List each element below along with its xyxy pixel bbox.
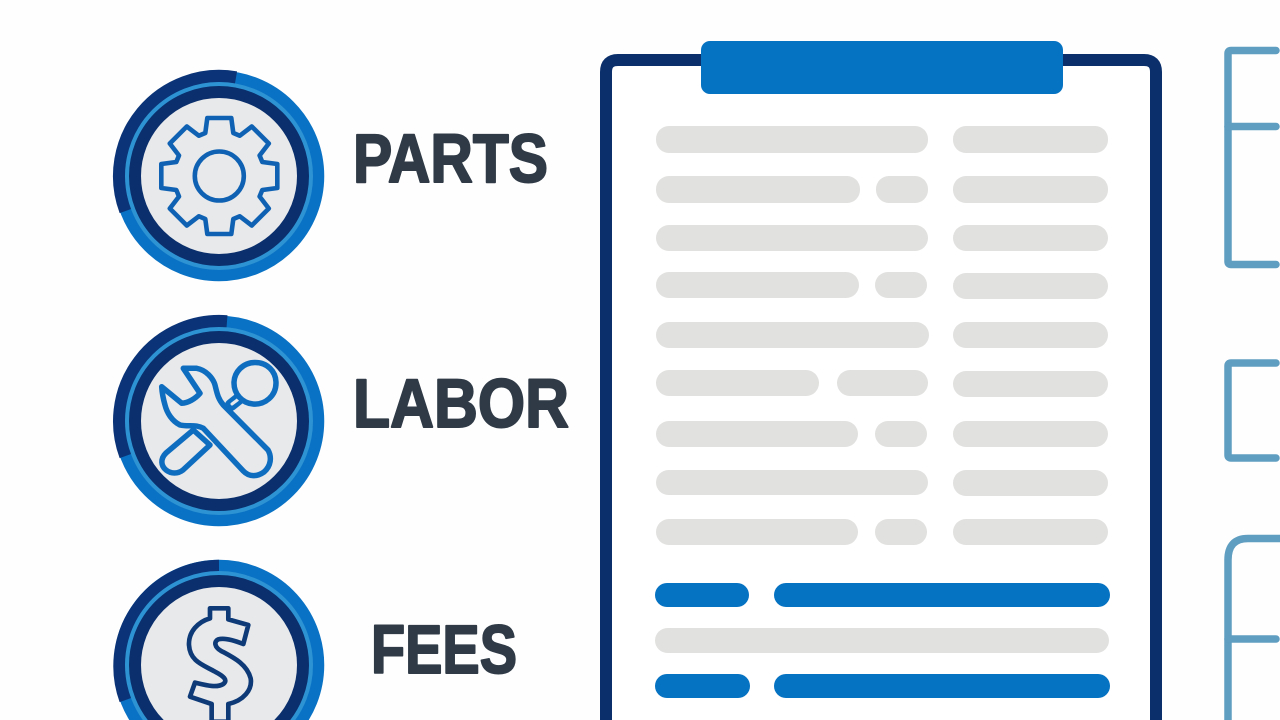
total rows	[655, 583, 1110, 698]
panel: clipboard	[606, 41, 1156, 720]
clipboard frame	[606, 60, 1156, 720]
brackets: right-edge outlines	[1228, 50, 1280, 720]
icon: wrench and screwdriver badge	[119, 321, 318, 520]
icon: dollar badge	[113, 560, 324, 720]
heading: PARTS: PARTS	[353, 120, 548, 197]
heading: LABOR: LABOR	[353, 365, 569, 442]
list rows	[655, 126, 1109, 653]
clipboard clip	[701, 41, 1063, 94]
heading: FEES: FEES	[371, 611, 517, 688]
icon: gear badge	[119, 76, 318, 275]
